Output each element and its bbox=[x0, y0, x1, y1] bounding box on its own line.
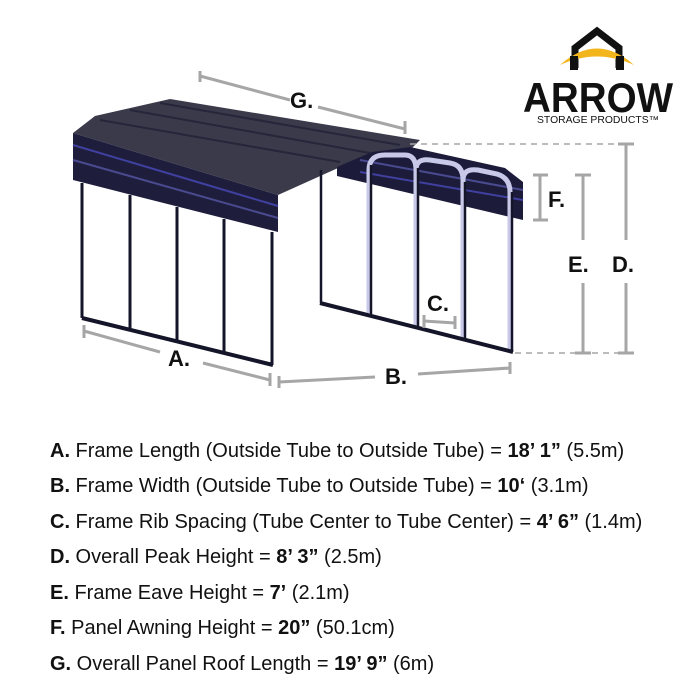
left side frame bbox=[82, 183, 273, 365]
dimension labels: E. bbox=[568, 252, 589, 277]
spec A: A. Frame Length (Outside Tube to Outside Tube) = 18’ 1” (5.5m) bbox=[50, 440, 624, 462]
dimension labels: F. bbox=[548, 187, 565, 212]
spec B: B. Frame Width (Outside Tube to Outside Tube) = 10‘ (3.1m) bbox=[50, 475, 589, 497]
logo: Arrow Storage Products bbox=[523, 26, 673, 126]
dimension labels: B. bbox=[385, 364, 407, 389]
right side frame with arches bbox=[320, 155, 513, 352]
icon: house roof bbox=[560, 31, 634, 70]
spec E: E. Frame Eave Height = 7’ (2.1m) bbox=[50, 582, 350, 604]
dimension labels bbox=[168, 88, 634, 389]
carport illustration bbox=[72, 71, 634, 389]
logo: Arrow Storage Products: STORAGE PRODUCTS™ bbox=[537, 115, 659, 126]
dimension labels: G. bbox=[290, 88, 313, 113]
spec G: G. Overall Panel Roof Length = 19’ 9” (6m) bbox=[50, 653, 434, 675]
dimension lines bbox=[84, 71, 634, 388]
spec D: D. Overall Peak Height = 8’ 3” (2.5m) bbox=[50, 546, 382, 568]
spec list bbox=[50, 440, 642, 675]
spec F: F. Panel Awning Height = 20” (50.1cm) bbox=[50, 617, 395, 639]
dimension labels: D. bbox=[612, 252, 634, 277]
spec C: C. Frame Rib Spacing (Tube Center to Tube Center) = 4’ 6” (1.4m) bbox=[50, 511, 642, 533]
roof bbox=[73, 99, 523, 232]
dimension labels: C. bbox=[427, 291, 449, 316]
dimension labels: A. bbox=[168, 346, 190, 371]
